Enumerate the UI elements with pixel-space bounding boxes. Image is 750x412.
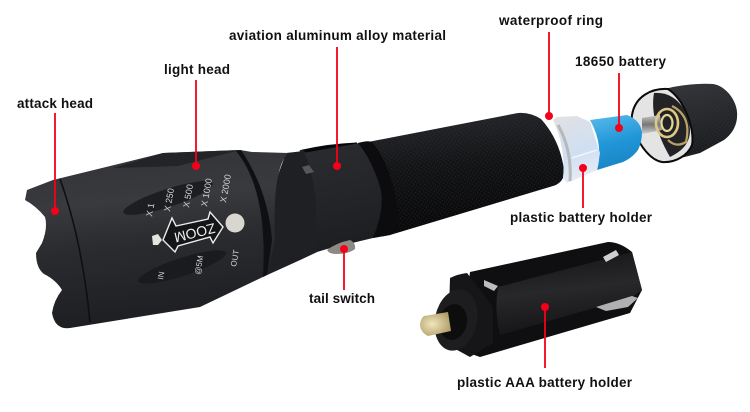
scale labels: X 500 xyxy=(181,183,195,208)
flashlight xyxy=(25,84,737,328)
callout: plastic battery holder: plastic battery holder xyxy=(510,210,653,225)
clip band xyxy=(303,143,357,152)
callout: 18650 battery: 18650 battery xyxy=(575,54,666,69)
scale labels: IN xyxy=(156,271,166,280)
scale labels: X 2000 xyxy=(218,174,233,203)
scale labels: X 1 xyxy=(144,202,156,217)
callout: tail switch: tail switch xyxy=(309,291,375,306)
callout: plastic AAA battery holder: plastic AAA battery holder xyxy=(457,375,633,390)
callout: aviation aluminum alloy material xyxy=(229,28,446,170)
scale labels: OUT xyxy=(229,249,241,267)
top shadow wedge xyxy=(113,150,240,168)
tapered neck xyxy=(267,151,317,275)
callout: light head xyxy=(164,62,230,170)
scale labels xyxy=(144,174,241,280)
window slot lower xyxy=(135,244,229,290)
callout: attack head: attack head xyxy=(17,96,93,111)
scale labels: @5M xyxy=(193,255,205,275)
tail switch button xyxy=(327,240,355,254)
blue battery xyxy=(590,115,642,170)
callout: plastic battery holder xyxy=(510,164,653,225)
collar ring xyxy=(358,141,398,238)
callout: attack head xyxy=(17,96,93,215)
main tube xyxy=(368,113,564,238)
neck highlight xyxy=(302,165,314,174)
light head body with bezel xyxy=(25,150,288,328)
brass pin xyxy=(420,312,451,336)
ridge xyxy=(496,252,642,335)
callout: plastic AAA battery holder xyxy=(457,303,633,390)
callout: waterproof ring xyxy=(498,13,603,120)
bezel seam xyxy=(60,179,90,322)
zoom arrow: ZOOM xyxy=(173,220,217,246)
window slot upper xyxy=(121,175,215,221)
waterproof ring and holder xyxy=(553,116,600,183)
zoom arrow xyxy=(152,212,244,252)
scale labels: X 1000 xyxy=(199,178,214,207)
head ridge xyxy=(236,150,272,277)
end cap xyxy=(632,84,737,162)
AAA battery holder xyxy=(420,242,642,357)
scale labels: X 250 xyxy=(162,187,176,212)
callout: light head: light head xyxy=(164,62,230,77)
neck segment xyxy=(267,143,382,275)
callout: tail switch xyxy=(309,245,375,306)
callout: 18650 battery xyxy=(575,54,666,132)
callout: aviation aluminum alloy material: aviation aluminum alloy material xyxy=(229,28,446,43)
springs xyxy=(603,250,619,262)
callout: waterproof ring: waterproof ring xyxy=(498,13,603,28)
